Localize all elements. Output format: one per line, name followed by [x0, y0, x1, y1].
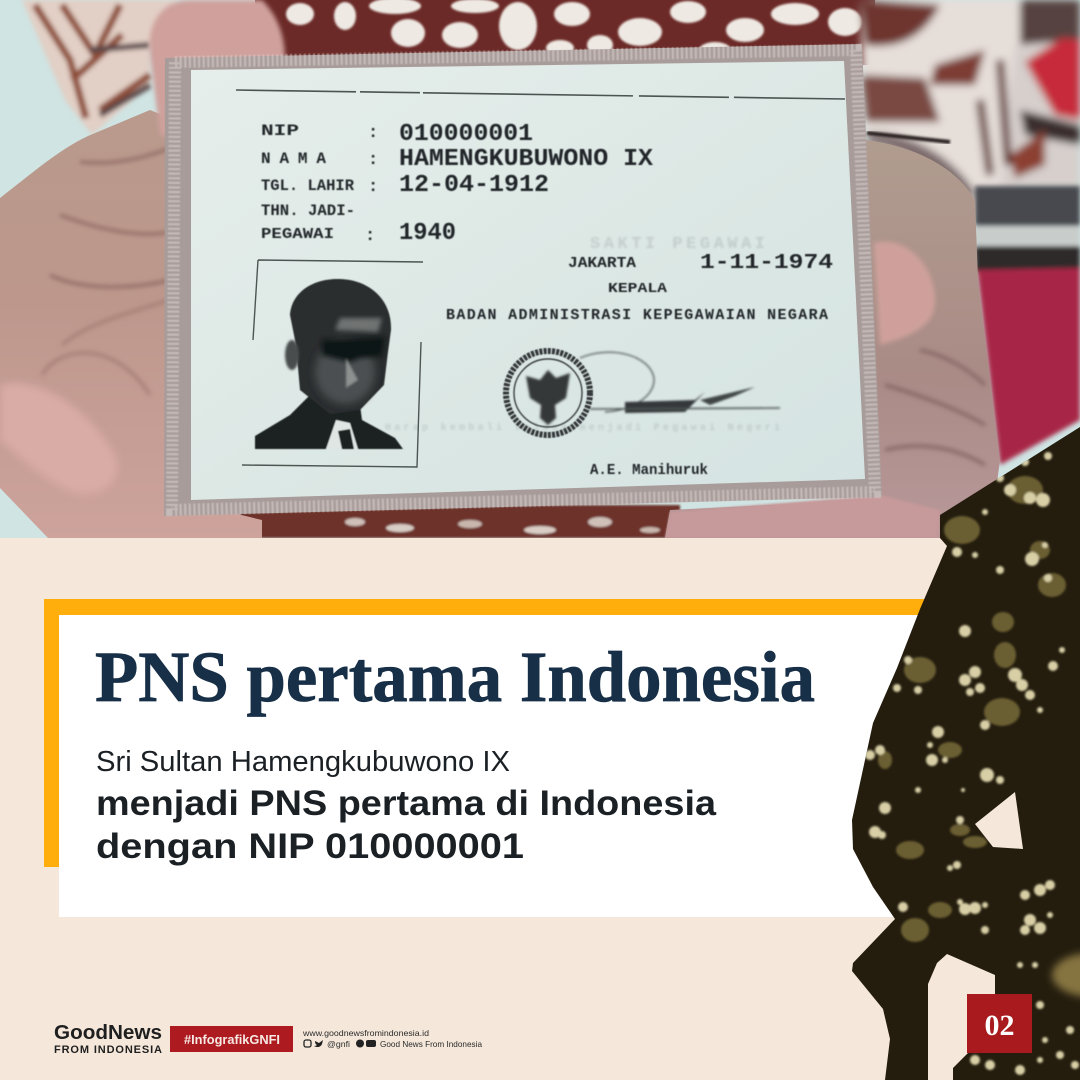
batik at the bottom between the hands [240, 505, 680, 538]
issuing office text block: 1-11-1974 [700, 252, 833, 275]
footer: website and social handles [302, 1028, 482, 1049]
portrait frame [242, 260, 423, 467]
description line 2: menjadi PNS pertama di Indonesia [96, 784, 717, 823]
field text block: HAMENGKUBUWONO IX [399, 146, 654, 173]
field text block: : [368, 178, 378, 197]
icon: twitter [314, 1040, 323, 1047]
field text block: : [365, 227, 375, 246]
field text block: 1940 [399, 220, 456, 247]
field text block: : [368, 151, 378, 170]
batik clothing at the top [22, 0, 1080, 215]
field text block: 010000001 [399, 121, 533, 148]
right sleeve and background objects [860, 0, 1080, 215]
field text block: NAMA [261, 150, 326, 168]
field text block: NIP [261, 122, 299, 140]
issuing office text block: JAKARTA [568, 255, 636, 272]
footer: GoodNews logo: GoodNews [54, 1022, 162, 1044]
right background: dark shelf and red cloth [975, 186, 1080, 465]
figure: floral-dress silhouette [840, 420, 1080, 1080]
page number badge: 02 [984, 1009, 1014, 1042]
twitter handle: @gnfi [327, 1039, 350, 1049]
field text block [261, 121, 654, 247]
photo backdrop: pale wall [0, 0, 1080, 538]
faint reverse-side text [385, 235, 780, 434]
icon: youtube [366, 1040, 376, 1047]
title panel: orange accent frame [44, 599, 925, 867]
dress base [840, 420, 1080, 1080]
ribbed sleeve border [172, 50, 875, 510]
official signature [580, 352, 780, 413]
laminated ID card [164, 44, 882, 516]
description line 3: dengan NIP 010000001 [96, 827, 524, 866]
footer: hashtag tag: #InfografikGNFI [184, 1033, 280, 1047]
issuing office text block: A.E. Manihuruk [590, 462, 708, 479]
portrait photo [255, 279, 403, 449]
faint reverse-side text: Harap kembali selama menjadi Pegawai Negeri [385, 422, 780, 434]
issuing office text block: KEPALA [608, 281, 668, 297]
exposed arm tone [1052, 953, 1080, 997]
footer: hashtag tag [170, 1026, 293, 1052]
description line 1: Sri Sultan Hamengkubuwono IX [96, 746, 510, 778]
card sleeve [164, 44, 882, 516]
field text block: THN. JADI- [261, 202, 355, 220]
dress floral print [865, 452, 1079, 1075]
field text block: PEGAWAI [261, 226, 334, 243]
sleeve cuff shadow [867, 133, 950, 142]
page number badge [967, 994, 1032, 1053]
seal stamp with garuda [506, 351, 590, 435]
footer: website and social handles: www.goodnewsfromindonesia.id [302, 1028, 429, 1038]
footer: GoodNews logo: FROM INDONESIA [54, 1044, 162, 1056]
top rule on the card [236, 90, 845, 99]
icon: facebook [356, 1040, 364, 1048]
description text block [96, 746, 717, 866]
left hand [0, 0, 285, 538]
right hand [665, 140, 1000, 538]
footer: GoodNews logo [54, 1022, 162, 1056]
title: PNS pertama Indonesia [95, 637, 815, 717]
field text block: : [368, 124, 378, 143]
issuing office text block: BADAN ADMINISTRASI KEPEGAWAIAN NEGARA [446, 307, 828, 324]
photo: hands holding the civil servant card [0, 0, 1080, 538]
title panel: white box [59, 615, 929, 917]
field text block: 12-04-1912 [399, 172, 549, 199]
channel name: Good News From Indonesia [380, 1039, 482, 1049]
field text block: TGL. LAHIR [261, 177, 354, 195]
left sleeve [22, 0, 178, 135]
card paper [191, 61, 865, 500]
issuing office text block [446, 252, 833, 479]
icon: instagram [304, 1040, 311, 1047]
faint reverse-side text: SAKTI PEGAWAI [590, 235, 765, 254]
